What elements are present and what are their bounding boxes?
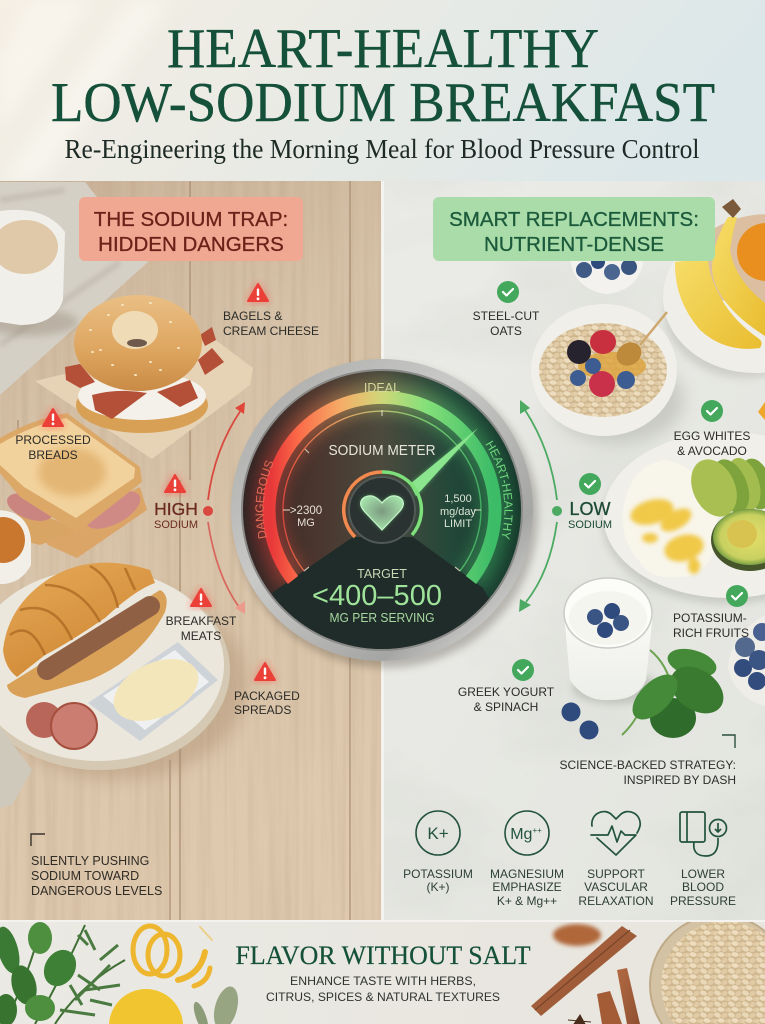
panel: smart replacements [384, 181, 765, 920]
label: processed breads: BREADS [28, 448, 78, 462]
label: low sodium: LOW [569, 499, 611, 519]
food: processed breads sandwich [0, 413, 147, 558]
gauge labels: LIMIT [444, 518, 472, 530]
label: packaged spreads: PACKAGED [234, 689, 300, 703]
gauge needle [410, 428, 478, 496]
food: spread bowl [0, 510, 31, 584]
food: cinnamon powder [553, 924, 601, 946]
label: breakfast meats [166, 589, 237, 643]
note: science-backed strategy [560, 735, 736, 787]
honey dipper [616, 342, 642, 366]
food: oats bowl [650, 915, 765, 1024]
label: greek yogurt and spinach: & SPINACH [474, 700, 538, 714]
label: magnesium: EMPHASIZE [492, 880, 562, 894]
label: potassium: (K+) [426, 880, 450, 894]
label: potassium: POTASSIUM [403, 867, 473, 881]
icon: magnesium [505, 811, 549, 855]
label: breakfast meats: MEATS [181, 629, 221, 643]
icon: heart with pulse [591, 812, 640, 855]
label: egg whites and avocado [674, 400, 750, 458]
berries [567, 330, 635, 397]
food: banana bowl [663, 199, 765, 378]
label: support vascular relaxation: RELAXATION [578, 894, 654, 908]
title: LOW-SODIUM BREAKFAST [51, 72, 715, 134]
food: cinnamon sticks [531, 926, 640, 1024]
title [51, 18, 715, 134]
label: steel-cut oats: STEEL-CUT [473, 309, 540, 323]
butter packet [88, 642, 218, 741]
label: high sodium: SODIUM [154, 519, 198, 531]
label: bagels [223, 284, 319, 338]
food: egg and avocado plate [602, 432, 765, 604]
label: steel-cut oats [473, 281, 540, 338]
avocado slices [691, 458, 765, 517]
napkin corner [0, 727, 32, 808]
label: low sodium [568, 473, 612, 531]
salami slices [26, 702, 97, 749]
heading: the sodium trap: HIDDEN DANGERS [98, 233, 284, 256]
food: lemon [109, 989, 183, 1024]
croissant roll and sausage [3, 563, 167, 698]
chart: sodium meter gauge [230, 359, 542, 672]
avocado half [711, 509, 765, 571]
note: science-backed strategy: INSPIRED BY DASH [624, 773, 736, 787]
label: packaged spreads [234, 663, 300, 717]
food: oatmeal bowl [531, 304, 684, 444]
food: sage leaves [191, 984, 242, 1024]
gauge labels: SODIUM METER [328, 443, 436, 459]
header band [0, 0, 765, 181]
food: napkin and coffee [0, 182, 148, 395]
arrow: high sodium arc [203, 402, 245, 614]
label: magnesium: K+ & Mg++ [497, 894, 557, 908]
label: potassium [403, 867, 473, 894]
food: plate with croissant [0, 563, 248, 780]
label: lower blood pressure: PRESSURE [670, 894, 736, 908]
label: steel-cut oats: OATS [490, 324, 522, 338]
label: support vascular relaxation: VASCULAR [584, 880, 648, 894]
panel: flavor without salt [0, 915, 765, 1024]
heading: smart replacements: SMART REPLACEMENTS: [449, 208, 699, 231]
note: silently pushing sodium [31, 834, 162, 898]
gauge labels: DANGEROUS [255, 460, 273, 539]
heading: the sodium trap [79, 197, 303, 261]
note: science-backed strategy: SCIENCE-BACKED STRATEGY: [560, 758, 736, 772]
label: egg whites and avocado: EGG WHITES [674, 429, 750, 443]
label: low sodium: SODIUM [568, 519, 612, 531]
text: flavor subtitle: ENHANCE TASTE WITH HERBS, [290, 974, 476, 988]
food: blueberry bowl [570, 261, 644, 294]
arrow: low sodium arc [519, 400, 562, 612]
label: potassium-rich fruits: RICH FRUITS [673, 626, 749, 640]
gauge labels: MG [297, 517, 315, 529]
food: table blueberries [562, 702, 598, 740]
gauge labels: 1,500 [444, 493, 472, 505]
gauge target readout [312, 567, 442, 625]
icon: potassium: K+ [427, 824, 449, 843]
food: bagel with bacon [35, 295, 253, 459]
label: lower blood pressure: LOWER [681, 867, 725, 881]
food: spinach [621, 648, 724, 738]
note: silently pushing sodium: SILENTLY PUSHING [31, 854, 149, 868]
gauge target readout: TARGET [357, 567, 407, 581]
gauge labels: HEART-HEALTHY [486, 440, 513, 540]
panel: the sodium trap [0, 181, 381, 920]
label: support vascular relaxation: SUPPORT [587, 867, 646, 881]
label: potassium-rich fruits: POTASSIUM- [673, 611, 747, 625]
icon: magnesium: ++ [532, 826, 542, 835]
label: processed breads: PROCESSED [15, 433, 91, 447]
label: breakfast meats: BREAKFAST [166, 614, 237, 628]
label: lower blood pressure: BLOOD [682, 880, 724, 894]
heading: smart replacements: NUTRIENT-DENSE [484, 233, 664, 256]
gauge target readout: <400–500 [312, 580, 442, 612]
label: greek yogurt and spinach: GREEK YOGURT [458, 685, 555, 699]
text: flavor subtitle: CITRUS, SPICES & NATURAL TEXTURES [266, 990, 500, 1004]
label: high sodium [154, 475, 198, 531]
gauge hub [344, 472, 421, 543]
label: greek yogurt and spinach [458, 659, 555, 714]
gauge arc [269, 397, 495, 580]
heading: smart replacements [433, 197, 715, 261]
note: silently pushing sodium: SODIUM TOWARD [31, 869, 139, 883]
food: fruit bowl [728, 615, 765, 706]
label: bagels: CREAM CHEESE [223, 324, 319, 338]
label: egg whites and avocado: & AVOCADO [677, 444, 747, 458]
label: lower blood pressure [670, 867, 736, 908]
food: herbs [0, 922, 125, 1024]
gauge labels [255, 381, 513, 540]
icon: potassium [416, 811, 460, 855]
food: orange slice [758, 402, 765, 420]
label: magnesium [490, 867, 564, 908]
label: potassium-rich fruits [673, 585, 749, 640]
note: silently pushing sodium: DANGEROUS LEVELS [31, 884, 162, 898]
label: processed breads [15, 409, 91, 462]
heading: the sodium trap: THE SODIUM TRAP: [94, 208, 288, 231]
label: magnesium: MAGNESIUM [490, 867, 564, 881]
label: high sodium: HIGH [154, 499, 198, 519]
heading: flavor without salt: FLAVOR WITHOUT SALT [236, 941, 531, 970]
gauge labels: mg/day [440, 506, 477, 518]
icon: blood pressure cuff [680, 812, 726, 856]
gauge target readout: MG PER SERVING [330, 611, 434, 625]
gauge labels: >2300 [290, 505, 322, 517]
food: yogurt glass [564, 578, 660, 704]
food: lemon peel [133, 926, 212, 986]
title: HEART-HEALTHY [167, 18, 599, 80]
icon: heart [361, 496, 403, 530]
gauge labels: IDEAL [364, 381, 400, 395]
subtitle: Re-Engineering the Morning Meal for Blood Pressure Control [64, 134, 700, 164]
text: flavor subtitle [266, 974, 500, 1004]
icon: magnesium: Mg [510, 826, 532, 843]
label: support vascular relaxation [578, 867, 654, 908]
label: bagels: BAGELS & [223, 309, 282, 323]
label: packaged spreads: SPREADS [234, 703, 291, 717]
